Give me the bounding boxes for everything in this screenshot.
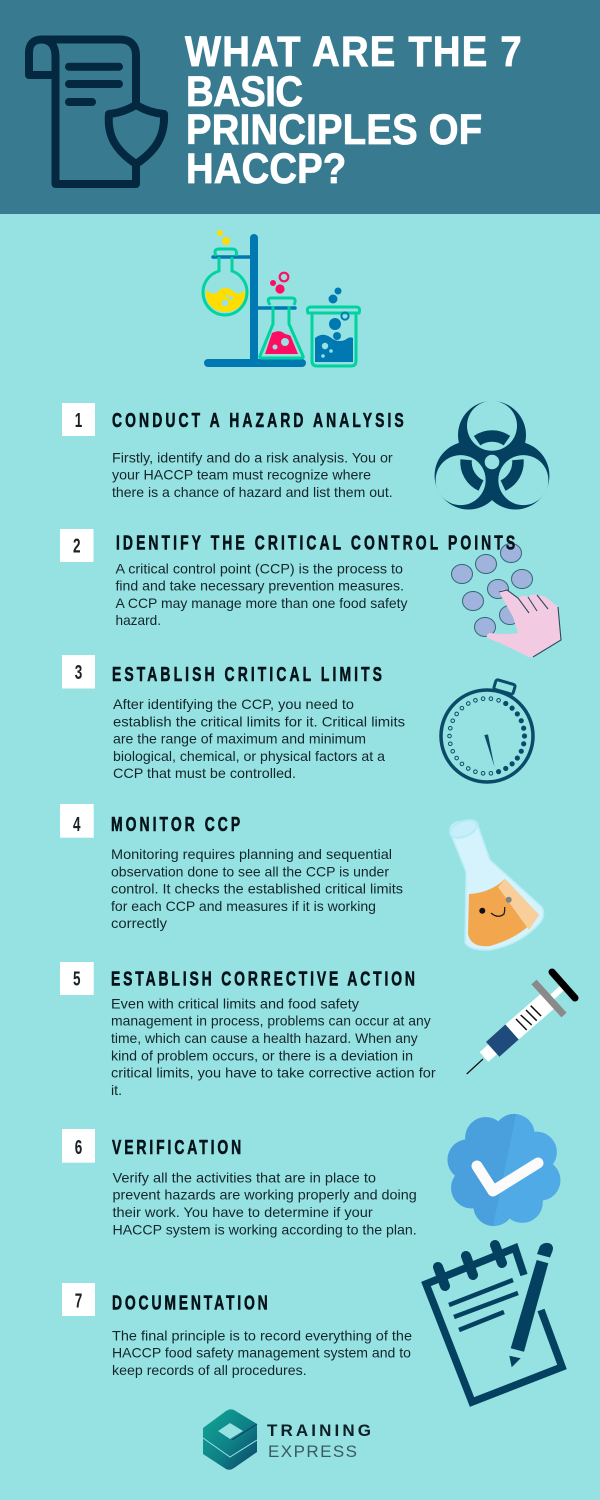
body text 5 <box>111 995 436 1098</box>
icon: smiling conical flask <box>448 817 544 950</box>
title <box>185 27 522 192</box>
logo mark <box>203 1409 257 1470</box>
number badge 4: 4 <box>73 812 81 836</box>
body text 3: are the range of maximum and minimum <box>113 731 366 747</box>
logo wordmark: TRAINING <box>267 1421 371 1440</box>
body text 7: keep records of all procedures. <box>112 1362 307 1378</box>
number badge 6: 6 <box>75 1135 83 1159</box>
panel: step 6 <box>62 1114 560 1237</box>
panel: step 7 <box>62 1243 562 1402</box>
logo: Training Express <box>203 1409 371 1470</box>
header band <box>0 0 600 214</box>
number badge 7 <box>62 1283 95 1316</box>
round flask with yellow liquid <box>203 230 247 315</box>
body text 5: it. <box>111 1082 122 1098</box>
heading 3: ESTABLISH CRITICAL LIMITS <box>112 662 382 686</box>
body text 3: establish the critical limits for it. Critical limits <box>113 713 405 729</box>
body text 7: HACCP food safety management system and to <box>112 1345 411 1361</box>
body text 7: The final principle is to record everything of the <box>112 1328 412 1344</box>
heading 2: IDENTIFY THE CRITICAL CONTROL POINTS <box>116 531 515 554</box>
header panel <box>0 0 600 214</box>
logo wordmark: EXPRESS <box>268 1442 357 1461</box>
body text 1: your HACCP team must recognize where <box>112 467 371 483</box>
body text 4 <box>111 846 403 931</box>
body text 3 <box>113 696 405 781</box>
body text 4: correctly <box>111 915 167 931</box>
icon: laboratory flasks on a stand <box>203 230 360 366</box>
panel: step 5 <box>60 962 575 1098</box>
icon: notepad and pencil <box>426 1243 562 1402</box>
body text 1 <box>112 449 393 500</box>
body text 3: biological, chemical, or physical factors at a <box>113 748 385 764</box>
icon: hand pressing keypad <box>452 544 561 657</box>
heading 7: DOCUMENTATION <box>112 1291 268 1314</box>
number badge 6 <box>62 1129 95 1163</box>
body text 5: kind of problem occurs, or there is a deviation in <box>111 1047 413 1063</box>
body text 2 <box>116 560 408 628</box>
heading 4: MONITOR CCP <box>111 812 240 836</box>
body text 6: HACCP system is working according to the plan. <box>112 1221 417 1237</box>
icon: stopwatch <box>441 679 533 782</box>
body text 4: observation done to see all the CCP is under <box>111 863 389 879</box>
number badge 5 <box>60 962 94 995</box>
panel: step 3 <box>62 655 533 782</box>
body text 5: critical limits, you have to take corrective action for <box>111 1065 436 1081</box>
body text 1: there is a chance of hazard and list them out. <box>112 484 393 500</box>
title: BASIC <box>186 67 303 115</box>
panel: step 1 <box>62 401 550 510</box>
body text 6: Verify all the activities that are in place to <box>112 1169 376 1185</box>
body text 2: find and take necessary prevention measures. <box>116 578 404 594</box>
body text 2: hazard. <box>116 612 161 628</box>
heading 1: CONDUCT A HAZARD ANALYSIS <box>112 408 404 432</box>
title: PRINCIPLES OF <box>186 105 482 153</box>
icon: biohazard symbol <box>434 401 550 510</box>
logo wordmark <box>267 1421 371 1461</box>
body text 7 <box>112 1328 412 1378</box>
body text 6: their work. You have to determine if your <box>112 1204 373 1220</box>
body text 5: time, which can cause a health hazard. When any <box>111 1030 418 1046</box>
heading 6: VERIFICATION <box>112 1135 241 1159</box>
panel: step 2 <box>60 529 561 657</box>
conical flask with pink liquid <box>260 273 303 358</box>
icon: document with shield <box>29 40 164 184</box>
stand <box>208 238 302 363</box>
number badge 2: 2 <box>73 534 80 557</box>
body text 6: prevent hazards are working properly and doing <box>112 1187 417 1203</box>
number badge 2 <box>60 529 94 562</box>
title: WHAT ARE THE 7 <box>185 27 522 75</box>
title: HACCP? <box>186 144 346 192</box>
number badge 4 <box>60 804 94 838</box>
body text 1: Firstly, identify and do a risk analysis. You or <box>112 449 393 465</box>
body text 6 <box>112 1169 417 1237</box>
body text 3: CCP that must be controlled. <box>113 765 296 781</box>
icon: syringe <box>467 972 575 1074</box>
body text 4: for each CCP and measures if it is working <box>111 898 376 914</box>
number badge 7: 7 <box>75 1289 82 1312</box>
number badge 5: 5 <box>73 967 81 990</box>
body text 5: management in process, problems can occur at any <box>111 1013 431 1029</box>
number badge 1 <box>62 403 95 436</box>
number badge 3: 3 <box>75 660 83 684</box>
icon: verified check badge <box>448 1114 560 1226</box>
body text 4: Monitoring requires planning and sequential <box>111 846 392 862</box>
panel: step 4 <box>60 804 544 950</box>
number badge 1: 1 <box>75 408 83 432</box>
body text 2: A critical control point (CCP) is the process to <box>116 560 403 576</box>
body text 5: Even with critical limits and food safety <box>111 995 359 1011</box>
body text 4: control. It checks the established critical limits <box>111 881 403 897</box>
body text 3: After identifying the CCP, you need to <box>113 696 354 712</box>
beaker with blue liquid <box>307 288 360 366</box>
number badge 3 <box>62 655 95 688</box>
heading 5: ESTABLISH CORRECTIVE ACTION <box>111 967 415 990</box>
body text 2: A CCP may manage more than one food safety <box>116 595 408 611</box>
